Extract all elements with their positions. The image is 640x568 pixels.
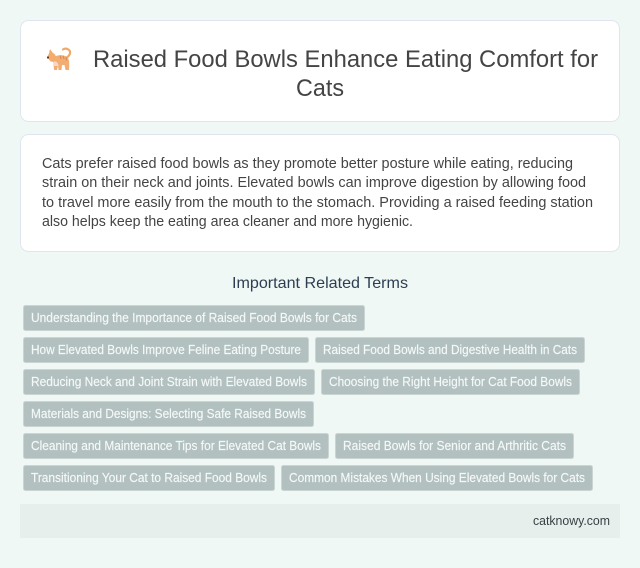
tag: Understanding the Importance of Raised Food Bowls for Cats <box>31 311 357 325</box>
icon: cat <box>47 49 70 70</box>
title text: Raised Food Bowls Enhance Eating Comfort for <box>93 46 598 73</box>
panel: title card <box>20 20 620 122</box>
tag: Raised Food Bowls and Digestive Health in Cats <box>323 343 577 357</box>
tag <box>24 466 274 490</box>
tag <box>282 466 592 490</box>
tag <box>24 338 308 362</box>
title text: Cats <box>296 75 344 102</box>
description text: Cats prefer raised food bowls as they promote better posture while eating, reducing <box>42 156 573 172</box>
description text: also helps keep the eating area cleaner and more hygienic. <box>42 214 413 230</box>
tag <box>24 306 364 330</box>
tag: Reducing Neck and Joint Strain with Elevated Bowls <box>31 375 307 389</box>
description text <box>42 156 593 230</box>
panel: description card <box>20 134 620 252</box>
tag: Materials and Designs: Selecting Safe Raised Bowls <box>31 407 306 421</box>
footer source: catknowy.com <box>533 514 610 528</box>
tag: Raised Bowls for Senior and Arthritic Cats <box>343 439 566 453</box>
tag: Choosing the Right Height for Cat Food Bowls <box>329 375 572 389</box>
heading: related terms: Important Related Terms <box>232 275 408 292</box>
tag <box>24 434 328 458</box>
tag: Transitioning Your Cat to Raised Food Bowls <box>31 471 267 485</box>
tag <box>24 370 314 394</box>
tag <box>316 338 584 362</box>
description text: to travel more easily from the mouth to the stomach. Providing a raised feeding station <box>42 195 593 211</box>
title text <box>93 46 598 102</box>
footer <box>20 504 620 538</box>
tag: How Elevated Bowls Improve Feline Eating Posture <box>31 343 301 357</box>
tag list <box>24 306 592 490</box>
tag: Common Mistakes When Using Elevated Bowls for Cats <box>289 471 585 485</box>
description text: strain on their neck and joints. Elevated bowls can improve digestion by allowing food <box>42 175 586 191</box>
tag <box>322 370 580 394</box>
tag: Cleaning and Maintenance Tips for Elevated Cat Bowls <box>31 439 321 453</box>
tag <box>24 402 314 426</box>
tag <box>336 434 574 458</box>
